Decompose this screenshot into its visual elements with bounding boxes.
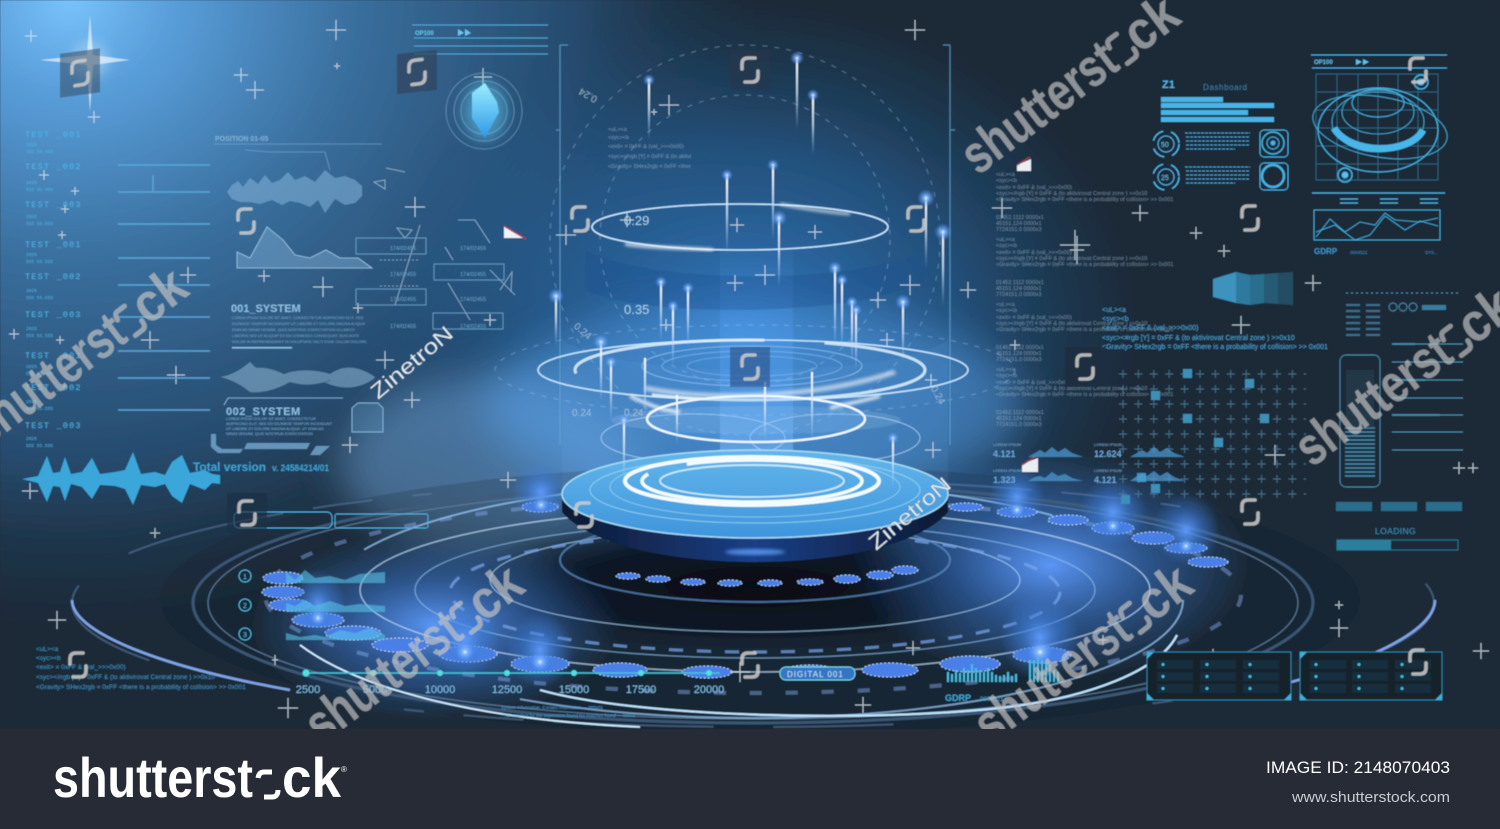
- dashboard text lines: [1185, 133, 1250, 183]
- global data values: 174/02455: [390, 324, 416, 330]
- digital tag: DIGITAL 001: [787, 670, 844, 679]
- left lower code: [36, 646, 246, 691]
- numbered rows: 3: [243, 632, 247, 639]
- radar panel: [1308, 55, 1452, 182]
- gauge 50: 50: [1161, 142, 1169, 149]
- audio waveform: [22, 452, 220, 505]
- center code block: <syc><b: [608, 135, 629, 141]
- target grid highlights: [1121, 369, 1269, 504]
- 002 system heading: 002_SYSTEM: [226, 406, 301, 418]
- target grid: [1116, 367, 1306, 505]
- watermark right: shutterst: [1283, 321, 1463, 478]
- small stat charts: 1.323: [993, 475, 1016, 485]
- left test list: 2025: [26, 326, 37, 332]
- left test list: TEST _001: [25, 240, 82, 250]
- gdrp serial: 0004521: [1350, 250, 1368, 255]
- left test list: TEST _003: [25, 200, 82, 210]
- left test list: TEST _002: [25, 162, 82, 172]
- small stat charts: 12.624: [1094, 449, 1122, 459]
- 002 system rule: [224, 398, 343, 405]
- 001 system paragraph: DOLOR IN REPREHENDERIT IN VOLUPTATE VELIT ESSE CILLUM DOLORE: [232, 340, 367, 344]
- podium base: [562, 450, 948, 562]
- hologram inner brightness: [485, 305, 1025, 505]
- small stat charts: 4.121: [1094, 475, 1117, 485]
- right repeated code blocks: <Gravity> SHex2rgb = 0xFF <there is a probability of collision> >> 0x001: [996, 327, 1173, 333]
- tilted scale labels: 0.24: [577, 85, 600, 104]
- target square 2: [1260, 163, 1288, 190]
- watermark bottom left: shutterst: [293, 598, 473, 755]
- gauge 50: [1153, 131, 1179, 157]
- right repeated code blocks: <syc><#rgb [Y] = 0xFF & (to aktivirovat Central zone ) >>0x10: [996, 191, 1147, 197]
- 002 system paragraph: ADIPISCING ELIT, SED DO EIUSMOD TEMPOR INCIDIDUNT: [226, 422, 333, 426]
- right repeated code blocks: <exit> = 0xFF & (val_>>>0x00): [996, 380, 1072, 386]
- centre black shadow under podium: [506, 532, 962, 642]
- right repeated code blocks: <Gravity> SHex2rgb = 0xFF <there is a probability of collision> >> 0x001: [996, 392, 1173, 398]
- gem icon: [446, 73, 522, 149]
- noise waveform: [227, 170, 362, 213]
- base tab row: [234, 512, 428, 528]
- mid nodes network: [374, 168, 515, 320]
- global data values: 174/02455: [390, 297, 416, 303]
- sys label: SYS...: [1425, 250, 1438, 255]
- top hologram ring: [592, 204, 888, 250]
- left test list: 555 55.555: [26, 371, 53, 377]
- small stat charts: LOREM IPSUM: [1094, 468, 1122, 473]
- corner bracket with slashes: [211, 434, 330, 455]
- chip icon: [352, 403, 383, 432]
- left test list: 555 55.555: [26, 333, 53, 339]
- right repeated code blocks: 45151.124 0000x1: [996, 351, 1042, 357]
- small stat charts: [993, 442, 1185, 485]
- zinetron signature left: ZinetroN: [366, 322, 458, 404]
- frame verticals: [556, 45, 955, 445]
- value 0.29: 0.29: [624, 213, 649, 228]
- global data values: 174/02455: [390, 246, 416, 252]
- streak top glows: [548, 51, 952, 444]
- dashed scale arcs: [495, 45, 1015, 435]
- right repeated code blocks: <syc><#rgb [Y] = 0xFF & (to aktivirovat Central zone ) >>0x10: [996, 321, 1147, 327]
- right large code: [1102, 307, 1328, 351]
- left test list: 2025: [26, 252, 37, 258]
- footer logo: ®: [341, 765, 347, 774]
- loading bar: [1337, 540, 1458, 550]
- watermark bottom right: ck: [1124, 551, 1204, 632]
- right ground glow: [850, 450, 1250, 680]
- target square 1: [1260, 130, 1288, 157]
- left test list: 2025: [26, 214, 37, 220]
- right repeated code blocks: 01452.1112 0000x1: [996, 345, 1044, 351]
- middle hologram ring with segments: [538, 340, 968, 400]
- left test list: 555 55.555: [26, 149, 53, 155]
- stray triangles: [504, 157, 1038, 472]
- left test list: TEST _001: [25, 130, 82, 140]
- 001 system paragraph: LABORIS NISI UT ALIQUIP EX EA COMMODO CONSEQUAT. DUIS AUTE: [232, 334, 359, 338]
- left test list: 2025: [26, 180, 37, 186]
- range slider: 2500: [296, 684, 320, 696]
- right repeated code blocks: <uL><a: [996, 237, 1016, 243]
- total version label: Total version: [193, 460, 266, 474]
- 001 system paragraph: LOREM IPSUM DOLOR SIT AMET, CONSECTETUR ADIPISCING ELIT, SED: [232, 316, 364, 320]
- gdrp panel label: GDRP: [1314, 247, 1338, 256]
- global data values: 174/02455: [460, 324, 486, 330]
- right large code: <syc><b: [1102, 316, 1129, 323]
- range slider: 12500: [492, 684, 522, 696]
- left test list: 2025: [26, 399, 37, 405]
- loading label: LOADING: [1375, 526, 1416, 536]
- funnel icon: [1213, 272, 1293, 305]
- hologram dome shade: [620, 272, 864, 310]
- right large code: <exit> = 0xFF & (val_>>>0x00): [1102, 325, 1198, 332]
- left lower code: <syc><#rgb [Y] = 0xFF & (to aktivirovat Central zone ) >>0x10: [36, 674, 215, 681]
- interwoven wave: [220, 362, 375, 392]
- center code block: <uL><a: [608, 127, 628, 133]
- small stat charts: 4.121: [993, 449, 1016, 459]
- status buttons: [1336, 502, 1462, 511]
- area chart: [237, 227, 372, 268]
- podium side: [562, 494, 948, 562]
- right repeated code blocks: 7724151.0 0000x3: [996, 227, 1042, 233]
- tilted scale labels: 0.24: [571, 321, 593, 342]
- left test list: [25, 130, 82, 449]
- global data boxes: [356, 238, 504, 329]
- position rule: [214, 144, 382, 170]
- left test list: TEST _002: [25, 383, 82, 393]
- global data values: 174/02455: [460, 246, 486, 252]
- podium glow highlights: [725, 549, 785, 555]
- right repeated code blocks: 45151.124 0000x1: [996, 221, 1042, 227]
- central blue haze: [402, 24, 1114, 638]
- range slider: 5000: [363, 684, 387, 696]
- small stat charts: LOREM IPSUM: [993, 468, 1021, 473]
- right repeated code blocks: <syc><#rgb [Y] = 0xFF & (to aktivirovat Central zone ) >>0x10: [996, 386, 1147, 392]
- right repeated code blocks: <exit> = 0xFF & (val_>>>0x00): [996, 185, 1072, 191]
- right repeated code blocks: 7724151.0 0000x3: [996, 292, 1042, 298]
- global data values: [390, 246, 486, 330]
- small contact text: System Information. Contact information — 000x01: [501, 705, 604, 710]
- digital tag: [780, 667, 855, 680]
- right large code: <Gravity> SHex2rgb = 0xFF <there is a probability of collision> >> 0x001: [1102, 344, 1328, 351]
- left test list: 2025: [26, 288, 37, 294]
- right large code: <syc><#rgb [Y] = 0xFF & (to aktivirovat Central zone ) >>0x10: [1102, 335, 1295, 342]
- right repeated code blocks: <syc><b: [996, 178, 1017, 184]
- podium rings: [590, 457, 920, 523]
- left test list: 555 55.555: [26, 187, 53, 193]
- right repeated code blocks: 45151.124 0000x1: [996, 286, 1042, 292]
- top-left light background: [0, 0, 712, 588]
- 001 system paragraph: EIUSMOD TEMPOR INCIDIDUNT UT LABORE ET DOLORE MAGNA ALIQUA: [232, 322, 365, 326]
- numbered rows: 1: [243, 574, 247, 581]
- right repeated code blocks: 7724151.0 0000x3: [996, 422, 1042, 428]
- hologram glass cylinder: [563, 342, 948, 484]
- 002 system paragraph: MINIM VENIAM, QUIS NOSTRUD EXERCITATION: [226, 432, 313, 436]
- equalizer bars: [948, 658, 1058, 682]
- small stat charts: LOREM IPSUM: [1094, 442, 1122, 447]
- line chart panel: [1312, 193, 1445, 240]
- range slider: 20000: [694, 684, 724, 696]
- control panel right: [1300, 652, 1442, 700]
- left lower code: <syc><b: [36, 655, 61, 662]
- 001 system paragraph: [232, 316, 367, 344]
- right large code: <uL><a: [1102, 307, 1126, 314]
- right repeated code blocks: <syc><b: [996, 373, 1017, 379]
- watermark bottom right: shutterst: [962, 598, 1142, 755]
- blue ground pads: [262, 502, 1228, 679]
- range slider: 17500: [626, 684, 656, 696]
- 002 system paragraph: [226, 417, 333, 436]
- left test list: 555 55.555: [26, 443, 53, 449]
- left horizontal bars: [118, 165, 210, 410]
- left test list: TEST _003: [25, 421, 82, 431]
- left test list: 2025: [26, 364, 37, 370]
- left test list: 555 55.555: [26, 406, 53, 412]
- dashboard bars: [1161, 97, 1274, 122]
- right repeated code blocks: <uL><a: [996, 367, 1016, 373]
- radar panel: OP100: [1314, 60, 1333, 66]
- tilted scale labels: 0.24: [624, 408, 644, 419]
- numbered rows: 2: [243, 603, 247, 610]
- version number: v. 24584214/01: [272, 463, 329, 473]
- device column and bars: [1340, 293, 1463, 487]
- left test list: 2025: [26, 436, 37, 442]
- center code block: <syc><#rgb [Y] = 0xFF & (to aktivi: [608, 154, 691, 160]
- pad light beams: [290, 462, 1220, 688]
- 002 system paragraph: LOREM IPSUM DOLOR SIT AMET, CONSECTETUR: [226, 417, 316, 421]
- website label: www.shutterstock.com: [1291, 789, 1450, 806]
- small contact text: **No matches for the expression found No matches found — 000x2: [501, 713, 636, 718]
- image id label: IMAGE ID: 2148070403: [1266, 759, 1450, 777]
- left test list: 555 55.555: [26, 221, 53, 227]
- right repeated code blocks: <Gravity> SHex2rgb = 0xFF <there is a probability of collision> >> 0x001: [996, 262, 1173, 268]
- small contact text: [501, 705, 636, 718]
- center code block: <exit> = 0xFF & (val_>>>0x00): [608, 144, 684, 150]
- right repeated code blocks: 45151.124 0000x1: [996, 416, 1042, 422]
- right repeated code blocks: 01452.1112 0000x1: [996, 410, 1044, 416]
- left test list: TEST _002: [25, 272, 82, 282]
- small stat charts: LOREM IPSUM: [993, 442, 1021, 447]
- right repeated code blocks: <exit> = 0xFF & (val_>>>0x00): [996, 315, 1072, 321]
- right repeated code blocks: <uL><a: [996, 172, 1016, 178]
- light streaks: [555, 58, 944, 488]
- right repeated code blocks: <Gravity> SHex2rgb = 0xFF <there is a probability of collision> >> 0x001: [996, 197, 1173, 203]
- left test list: TEST _001: [25, 351, 82, 361]
- right repeated code blocks: <uL><a: [996, 302, 1016, 308]
- right repeated code blocks: <syc><b: [996, 308, 1017, 314]
- gdrp lower serial: 0004521: [980, 697, 1004, 703]
- global data values: 174/02455: [460, 272, 486, 278]
- right repeated code blocks: <syc><b: [996, 243, 1017, 249]
- control panel left: [1147, 652, 1291, 700]
- range slider: 10000: [425, 684, 455, 696]
- left test list: 2025: [26, 142, 37, 148]
- watermark bottom left: ck: [455, 551, 535, 632]
- right repeated code blocks: 7724151.0 0000x3: [996, 357, 1042, 363]
- left test list: 555 55.555: [26, 259, 53, 265]
- position heading: POSITION 01-05: [215, 136, 268, 143]
- lower hologram ring: [601, 396, 920, 462]
- left lower code: <exit> = 0xFF & (val_>>>0x00): [36, 664, 126, 671]
- footer logo: shutterst: [53, 746, 253, 809]
- global data values: 174/02455: [460, 297, 486, 303]
- range slider: 15000: [559, 684, 589, 696]
- ground dark zone: [268, 470, 1058, 729]
- right repeated code blocks: 01452.1112 0000x1: [996, 215, 1044, 221]
- top mini header: OP100: [415, 31, 434, 37]
- z1 badge: Z1: [1162, 79, 1175, 91]
- concentric ground rings: [72, 479, 1435, 727]
- watermark left: ck: [119, 254, 199, 335]
- dashboard heading: Dashboard: [1203, 83, 1248, 92]
- left test list: 555 55.555: [26, 295, 53, 301]
- center code block: <Gravity> SHex2rgb = 0xFF <ther: [608, 164, 691, 170]
- 002 system paragraph: UT LABORE ET DOLORE MAGNA ALIQUA. UT ENIM AD: [226, 427, 324, 431]
- footer logo: ck: [282, 746, 342, 809]
- 001 system paragraph: ENIM AD MINIM VENIAM, QUIS NOSTRUD EXERCITATION ULLAMCO: [232, 328, 355, 332]
- left lower code: <Gravity> SHex2rgb = 0xFF <there is a probability of collision> >> 0x001: [36, 684, 246, 691]
- top mini header: [412, 25, 548, 54]
- range slider: [296, 670, 724, 696]
- 001 rule: [232, 347, 292, 348]
- gdrp lower label: GDRP: [945, 693, 971, 703]
- smoke around lower left of podium: [340, 375, 640, 555]
- value 0.35: 0.35: [624, 302, 649, 317]
- watermark top: shutterst: [949, 29, 1129, 186]
- global data values: 174/02455: [390, 272, 416, 278]
- tilted scale labels: 0.24: [572, 408, 592, 419]
- left ground glow: [250, 530, 620, 720]
- right repeated code blocks: 01452.1112 0000x1: [996, 280, 1044, 286]
- small logo tiles: [60, 48, 1426, 677]
- zinetron signature centre: ZinetroN: [864, 473, 956, 555]
- gauge 25: 25: [1161, 175, 1169, 182]
- tilted scale labels: 0.24: [928, 384, 947, 407]
- right repeated code blocks: <syc><#rgb [Y] = 0xFF & (to aktivirovat Central zone ) >>0x10: [996, 256, 1147, 262]
- hologram central light column: [720, 250, 793, 460]
- left test list: TEST _003: [25, 310, 82, 320]
- center code block: [608, 127, 691, 170]
- right repeated code blocks: [996, 172, 1173, 428]
- left lower code: <uL><a: [36, 646, 59, 653]
- right repeated code blocks: <exit> = 0xFF & (val_>>>0x00): [996, 250, 1072, 256]
- podium top disc: [562, 450, 948, 538]
- numbered rows: [239, 570, 385, 640]
- star flare: [40, 15, 130, 112]
- tilted scale labels: [571, 85, 947, 419]
- 001 system heading: 001_SYSTEM: [231, 303, 301, 315]
- gauge 25: [1153, 164, 1179, 190]
